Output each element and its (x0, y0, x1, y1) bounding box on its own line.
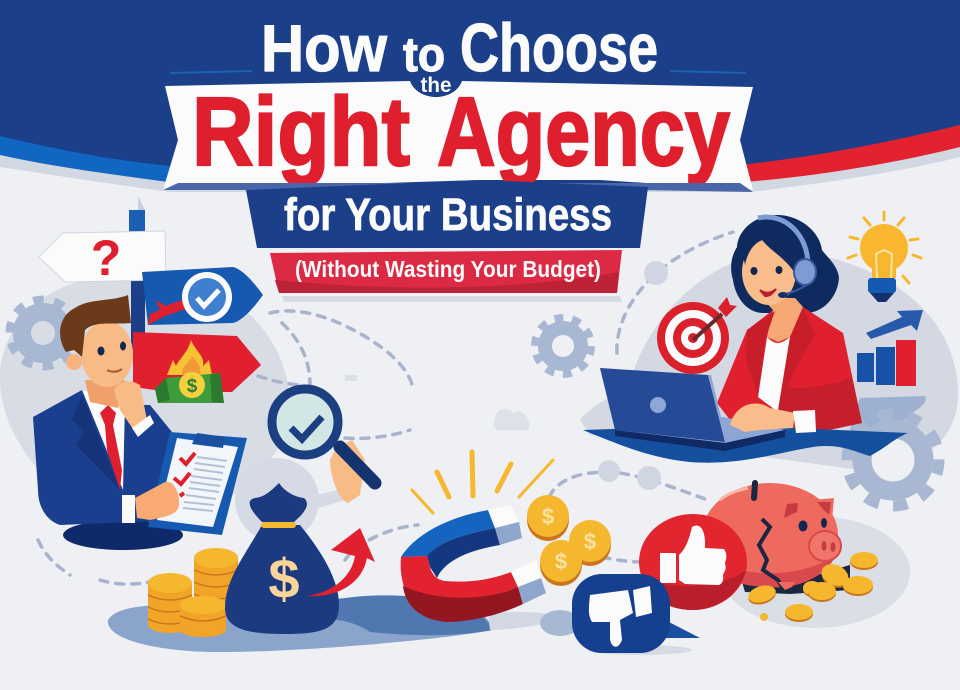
magnet (401, 505, 546, 622)
word: the: the (420, 74, 452, 97)
grey background blobs (0, 252, 958, 628)
clipboard (148, 432, 247, 535)
post (129, 196, 145, 350)
hand and cuff (730, 403, 816, 433)
coin stacks (148, 548, 238, 637)
scattered gold coins (746, 552, 878, 622)
white banner (163, 81, 753, 190)
blue rules (170, 71, 746, 73)
sign: question: ? (91, 230, 121, 286)
light bulb (848, 212, 921, 302)
headset (758, 217, 816, 298)
hand on chin (114, 381, 154, 437)
red subtitle ribbon (270, 250, 622, 302)
blue ribbon (163, 180, 753, 248)
thumbs down badge (540, 574, 700, 655)
flying coins (527, 495, 611, 586)
sign: burning budget: $ (187, 376, 198, 397)
heading: Right Agency (192, 77, 730, 186)
red growth arrow (307, 528, 375, 596)
thumbs up badge (639, 514, 747, 610)
title line: How to Choose: to (403, 29, 445, 82)
title line: How to Choose: How (261, 11, 388, 85)
torso (33, 390, 183, 550)
title line: How to Choose: Choose (460, 10, 658, 86)
piggy bank (702, 483, 850, 594)
magnet rays (412, 452, 553, 513)
target (657, 297, 737, 374)
money bag: $ (268, 547, 300, 610)
head (60, 295, 133, 408)
flying coins: $ (584, 529, 596, 554)
gear right (847, 396, 939, 506)
title banner group (163, 10, 753, 302)
sign: burning budget (133, 332, 261, 403)
blue ribbon: for Your Business (284, 189, 612, 240)
money bag (225, 483, 339, 634)
hair (731, 215, 839, 313)
gear centre (535, 318, 591, 374)
magnifier (272, 389, 375, 503)
red subtitle ribbon: (Without Wasting Your Budget) (295, 256, 601, 282)
hand and cuff (122, 482, 179, 523)
top header band (0, 0, 960, 192)
flying coins: $ (542, 504, 554, 529)
blazer (717, 298, 862, 433)
sign: question (39, 230, 166, 286)
face (740, 222, 805, 305)
agent woman (583, 215, 908, 463)
gear left (10, 300, 76, 366)
dashed connector lines (38, 232, 733, 584)
growth chart (857, 310, 923, 386)
desk swoosh (583, 428, 908, 463)
title line: How to Choose (261, 10, 658, 86)
businessman (33, 295, 247, 550)
sign: approved (142, 267, 263, 325)
heading: Right Agency: Right (192, 77, 410, 186)
signpost (39, 196, 263, 403)
small decorative nodes (345, 261, 668, 490)
shadows under money bag and magnet (108, 595, 560, 652)
heading: Right Agency: Agency (437, 77, 730, 186)
laptop (600, 368, 785, 451)
flying coins: $ (555, 549, 567, 574)
